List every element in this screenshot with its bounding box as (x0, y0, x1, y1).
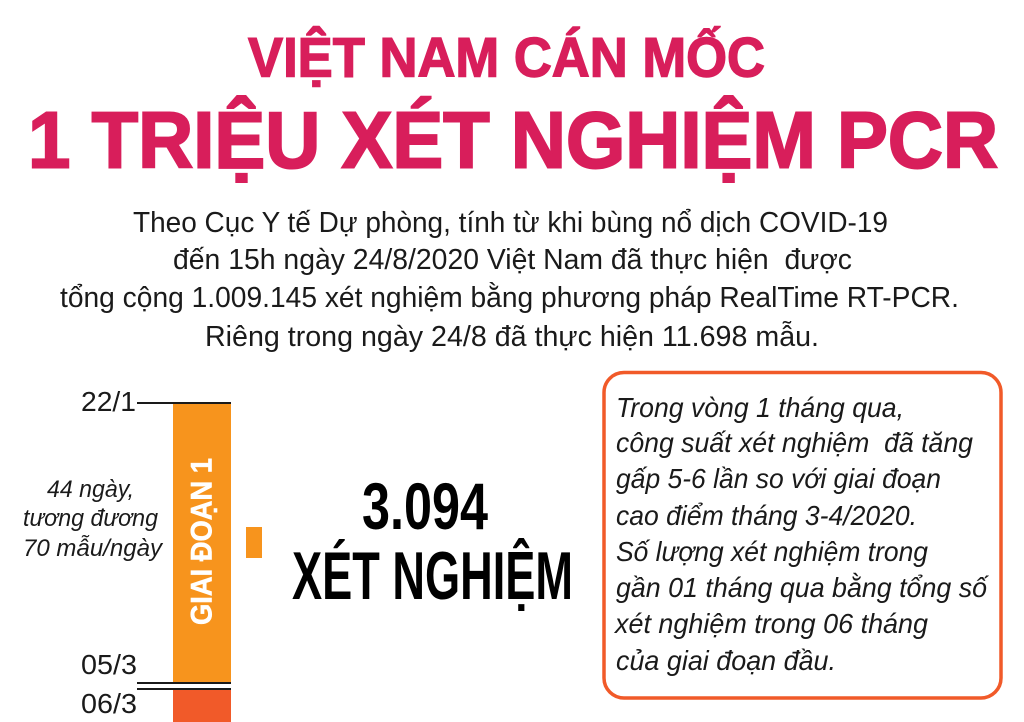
phase 1 note (23, 476, 164, 562)
callout text: gần 01 tháng qua bằng tổng số (616, 572, 989, 603)
timeline (81, 386, 231, 722)
ticks 05/3 and 06/3 (137, 682, 231, 690)
callout text: Trong vòng 1 tháng qua, (616, 392, 904, 423)
phase 2 bar (173, 690, 231, 722)
statistic: 3.094 tests (292, 469, 573, 614)
date label: 22/1: 22/1 (81, 386, 136, 417)
callout text: Số lượng xét nghiệm trong (616, 536, 928, 567)
title: 1 TRIỆU XÉT NGHIỆM PCR (28, 96, 998, 184)
intro text block: tổng cộng 1.009.145 xét nghiệm bằng phương pháp RealTime RT-PCR. (60, 281, 959, 314)
intro text block: Theo Cục Y tế Dự phòng, tính từ khi bùng nổ dịch COVID-19 (133, 207, 888, 239)
callout text: cao điểm tháng 3-4/2020. (616, 500, 917, 531)
title (28, 26, 998, 184)
tick 22/1 (137, 402, 231, 404)
date label: 06/3: 06/3 (81, 688, 137, 719)
callout text: xét nghiệm trong 06 tháng (613, 608, 928, 639)
orange marker (246, 527, 262, 558)
callout text (613, 392, 989, 676)
intro text block: đến 15h ngày 24/8/2020 Việt Nam đã thực hiện được (173, 244, 852, 276)
phase 1 note: 44 ngày, (47, 476, 134, 503)
phase 1 note: tương đương (23, 505, 159, 532)
intro text block: Riêng trong ngày 24/8 đã thực hiện 11.698 mẫu. (205, 320, 819, 353)
date label: 05/3: 05/3 (81, 649, 137, 680)
callout border (604, 372, 1001, 698)
statistic: 3.094 tests: 3.094 (362, 469, 488, 543)
callout text: của giai đoạn đầu. (616, 645, 836, 676)
phase 1 note: 70 mẫu/ngày (23, 534, 164, 562)
callout text: gấp 5-6 lần so với giai đoạn (616, 463, 941, 494)
phase 1 bar (173, 403, 231, 684)
intro text block (60, 207, 959, 353)
callout (604, 372, 1001, 698)
title: VIỆT NAM CÁN MỐC (248, 26, 765, 88)
callout text: công suất xét nghiệm đã tăng (616, 427, 973, 458)
phase 1 label: GIAI ĐOẠN 1 (186, 458, 218, 625)
statistic: 3.094 tests: XÉT NGHIỆM (292, 537, 573, 614)
